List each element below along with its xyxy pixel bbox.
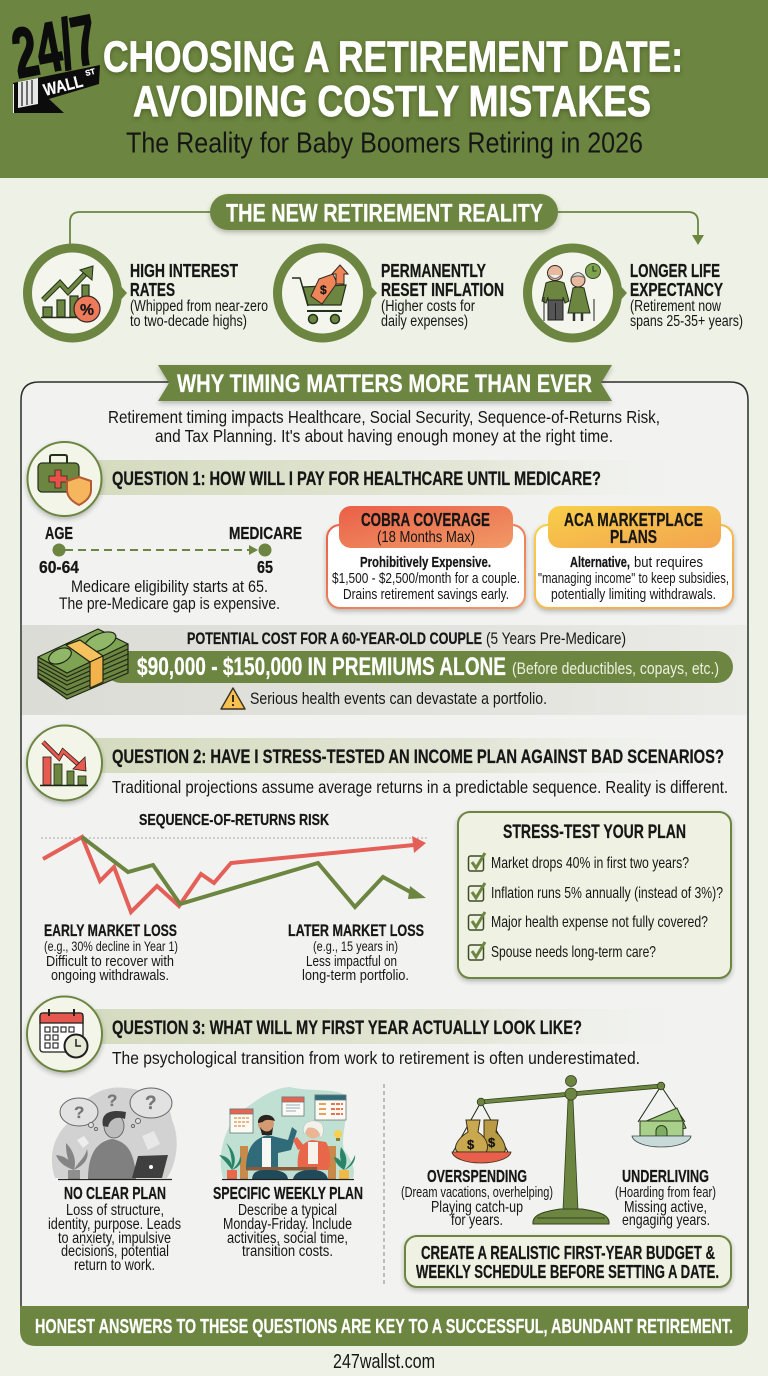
reality item: high interest rates: [28, 248, 268, 338]
cash on right pan: [632, 1108, 691, 1147]
ribbon heading: why timing matters: [158, 365, 612, 401]
money bags on left pan: $: [467, 1137, 475, 1152]
text: no clear plan: decisions, potential: [61, 1243, 169, 1260]
medicare timeline: The pre-Medicare gap is expensive.: [59, 595, 280, 613]
text: underliving: engaging years.: [622, 1212, 710, 1229]
card: COBRA coverage: (18 Months Max): [377, 529, 475, 546]
title: AVOIDING COSTLY MISTAKES: [133, 77, 651, 126]
later market loss note: LATER MARKET LOSS: [288, 922, 424, 940]
heading pill: the new retirement reality: [210, 194, 558, 230]
later market loss note: long-term portfolio.: [302, 967, 409, 984]
heading pill: the new retirement reality: THE NEW RETIREMENT REALITY: [226, 200, 543, 228]
intro text: [108, 407, 660, 446]
text block: (Higher costs for: [381, 298, 475, 315]
logo: 24/7 Wall St: [6, 0, 103, 113]
text: overspending: Playing catch-up: [431, 1199, 523, 1216]
text block: RESET INFLATION: [381, 280, 504, 300]
text: overspending: for years.: [451, 1212, 503, 1229]
later market loss note: Less impactful on: [306, 953, 397, 970]
illustration: couple planning weekly schedule: [219, 1087, 355, 1180]
subtitle: The Reality for Baby Boomers Retiring in 2026: [126, 128, 643, 160]
text block: spans 25-35+ years): [630, 313, 743, 330]
checklist item: [468, 853, 689, 872]
card: COBRA coverage: Prohibitively Expensive.: [360, 554, 491, 571]
premium pill: $90,000 - $150,000 IN PREMIUMS ALONE: [137, 653, 506, 681]
illustration: balance scale: [452, 1076, 691, 1224]
text: underliving: UNDERLIVING: [622, 1166, 709, 1186]
intro text: Retirement timing impacts Healthcare, Social Security, Sequence-of-Returns Risk,: [108, 407, 660, 427]
premium pill: [105, 651, 733, 683]
footer banner: [20, 1306, 748, 1346]
cost band: Serious health events can devastate a portfolio.: [250, 689, 547, 708]
medicare timeline: 60-64: [39, 557, 79, 577]
text: underliving: [615, 1166, 716, 1229]
medicare timeline: 65: [257, 557, 273, 577]
medicare timeline: [39, 523, 302, 613]
text block: LONGER LIFE: [630, 261, 720, 281]
intro text: and Tax Planning. It's about having enough money at the right time.: [155, 426, 613, 446]
premium pill: (Before deductibles, copays, etc.): [512, 660, 719, 678]
illustration: confused person with no plan: [52, 1088, 177, 1180]
text block: [130, 261, 268, 330]
card: ACA marketplace plans: [535, 506, 733, 608]
main panel: [21, 382, 748, 1308]
text block: [381, 261, 504, 330]
text block: HIGH INTEREST: [130, 261, 238, 281]
early market loss note: (e.g., 30% decline in Year 1): [44, 938, 178, 954]
question 1 heading: QUESTION 1: HOW WILL I PAY FOR HEALTHCARE UNTIL MEDICARE?: [112, 468, 601, 490]
icon: shopping cart with price tag: [278, 248, 377, 338]
later loss line: [82, 837, 426, 907]
text: underliving: (Hoarding from fear): [615, 1185, 716, 1201]
illustration: confused person with no plan: ?: [145, 1093, 157, 1114]
logo: 24/7 Wall St: ST: [84, 67, 96, 78]
text: specific weekly plan: [213, 1183, 363, 1260]
cost band: [22, 625, 747, 715]
later market loss note: (e.g., 15 years in): [313, 938, 398, 954]
title: [103, 32, 683, 126]
source url: 247wallst.com: [333, 1350, 435, 1373]
card: COBRA coverage: [327, 506, 525, 608]
checklist item: [468, 942, 656, 961]
reality item: permanently reset inflation: [278, 248, 504, 338]
connector arrow from pill to first and last items: [70, 212, 704, 245]
early market loss note: EARLY MARKET LOSS: [44, 922, 177, 940]
text block: (Retirement now: [630, 298, 722, 315]
early market loss note: ongoing withdrawals.: [51, 967, 169, 984]
card: COBRA coverage: $1,500 - $2,500/month for a couple.: [332, 570, 520, 587]
text: no clear plan: identity, purpose. Leads: [48, 1216, 181, 1233]
text: overspending: [401, 1166, 553, 1229]
icon: money stack: [38, 628, 128, 699]
later market loss note: [288, 922, 424, 984]
cost band: POTENTIAL COST FOR A 60-YEAR-OLD COUPLE: [187, 630, 482, 648]
reality item: longer life expectancy: [528, 248, 743, 338]
text block: RATES: [130, 280, 175, 300]
medicare timeline: AGE: [45, 523, 73, 543]
early market loss note: Difficult to recover with: [46, 953, 174, 970]
card: ACA marketplace plans: PLANS: [610, 526, 657, 547]
chart: sequence of returns risk: SEQUENCE-OF-RETURNS RISK: [139, 812, 330, 829]
text: no clear plan: to anxiety, impulsive: [58, 1230, 171, 1247]
panel: stress-test your plan: STRESS-TEST YOUR PLAN: [503, 822, 686, 843]
text block: [630, 261, 743, 330]
checklist item: Spouse needs long-term care?: [491, 944, 656, 961]
question 3 lead text: The psychological transition from work to retirement is often underestimated.: [112, 1048, 640, 1068]
question 1 heading: [28, 442, 715, 516]
text: specific weekly plan: transition costs.: [242, 1243, 333, 1260]
text block: daily expenses): [381, 313, 468, 330]
text block: (Whipped from near-zero: [130, 298, 268, 315]
text block: PERMANENTLY: [381, 261, 486, 281]
chart: sequence of returns risk: [41, 812, 428, 984]
icon: growth chart with percent: %: [80, 302, 94, 319]
medicare timeline: MEDICARE: [229, 523, 302, 543]
text: overspending: OVERSPENDING: [427, 1166, 527, 1186]
text: specific weekly plan: activities, social time,: [227, 1230, 348, 1247]
text: no clear plan: Loss of structure,: [66, 1202, 164, 1219]
text: underliving: Missing active,: [624, 1199, 707, 1216]
icon: warning triangle: [221, 688, 245, 709]
text: no clear plan: [48, 1183, 181, 1274]
icon: falling bar chart: [27, 726, 102, 800]
text block: EXPECTANCY: [630, 280, 723, 300]
text block: to two-decade highs): [130, 313, 247, 330]
icon: growth chart with percent: [28, 248, 127, 338]
checklist item: Market drops 40% in first two years?: [491, 855, 689, 872]
card: COBRA coverage: Drains retirement savings early.: [343, 586, 509, 603]
icon: elderly couple with clock: [528, 248, 627, 338]
card: ACA marketplace plans: ACA MARKETPLACE: [564, 509, 703, 530]
money bags on left pan: [452, 1120, 511, 1163]
early market loss note: [44, 922, 178, 984]
header banner: [0, 0, 768, 178]
question 3 heading: QUESTION 3: WHAT WILL MY FIRST YEAR ACTUALLY LOOK LIKE?: [112, 1017, 582, 1039]
logo: 24/7 Wall St: WALL: [41, 72, 85, 100]
icon: calendar and clock: [27, 996, 102, 1072]
card: ACA marketplace plans: potentially limiting withdrawals.: [551, 586, 716, 603]
text: no clear plan: return to work.: [74, 1257, 155, 1274]
text: specific weekly plan: SPECIFIC WEEKLY PLAN: [213, 1183, 363, 1203]
card: ACA marketplace plans: but requires: [634, 554, 703, 571]
ribbon heading: why timing matters: WHY TIMING MATTERS MORE THAN EVER: [177, 370, 592, 398]
checklist item: Major health expense not fully covered?: [491, 914, 708, 931]
question 3 heading: [27, 996, 715, 1072]
icon: medical case and shield: [28, 442, 102, 516]
text: overspending: (Dream vacations, overhelping): [401, 1185, 553, 1201]
panel: stress-test your plan: [458, 812, 731, 978]
illustration: confused person with no plan: ?: [107, 1091, 117, 1110]
icon: shopping cart with price tag: $: [320, 283, 327, 297]
text: no clear plan: NO CLEAR PLAN: [64, 1183, 166, 1203]
card: COBRA coverage: COBRA COVERAGE: [361, 509, 490, 530]
money bags on left pan: $: [488, 1135, 496, 1150]
illustration: confused person with no plan: ?: [74, 1103, 84, 1122]
card: ACA marketplace plans: Alternative,: [570, 554, 630, 571]
cost band: (5 Years Pre-Medicare): [486, 630, 626, 648]
question 2 heading: [27, 726, 745, 800]
callout: create a budget: [405, 1236, 731, 1287]
text: specific weekly plan: Describe a typical: [238, 1202, 337, 1219]
text: specific weekly plan: Monday-Friday. Include: [223, 1216, 352, 1233]
checklist item: [468, 912, 708, 931]
early loss line: [43, 836, 426, 912]
medicare timeline: Medicare eligibility starts at 65.: [71, 578, 268, 596]
